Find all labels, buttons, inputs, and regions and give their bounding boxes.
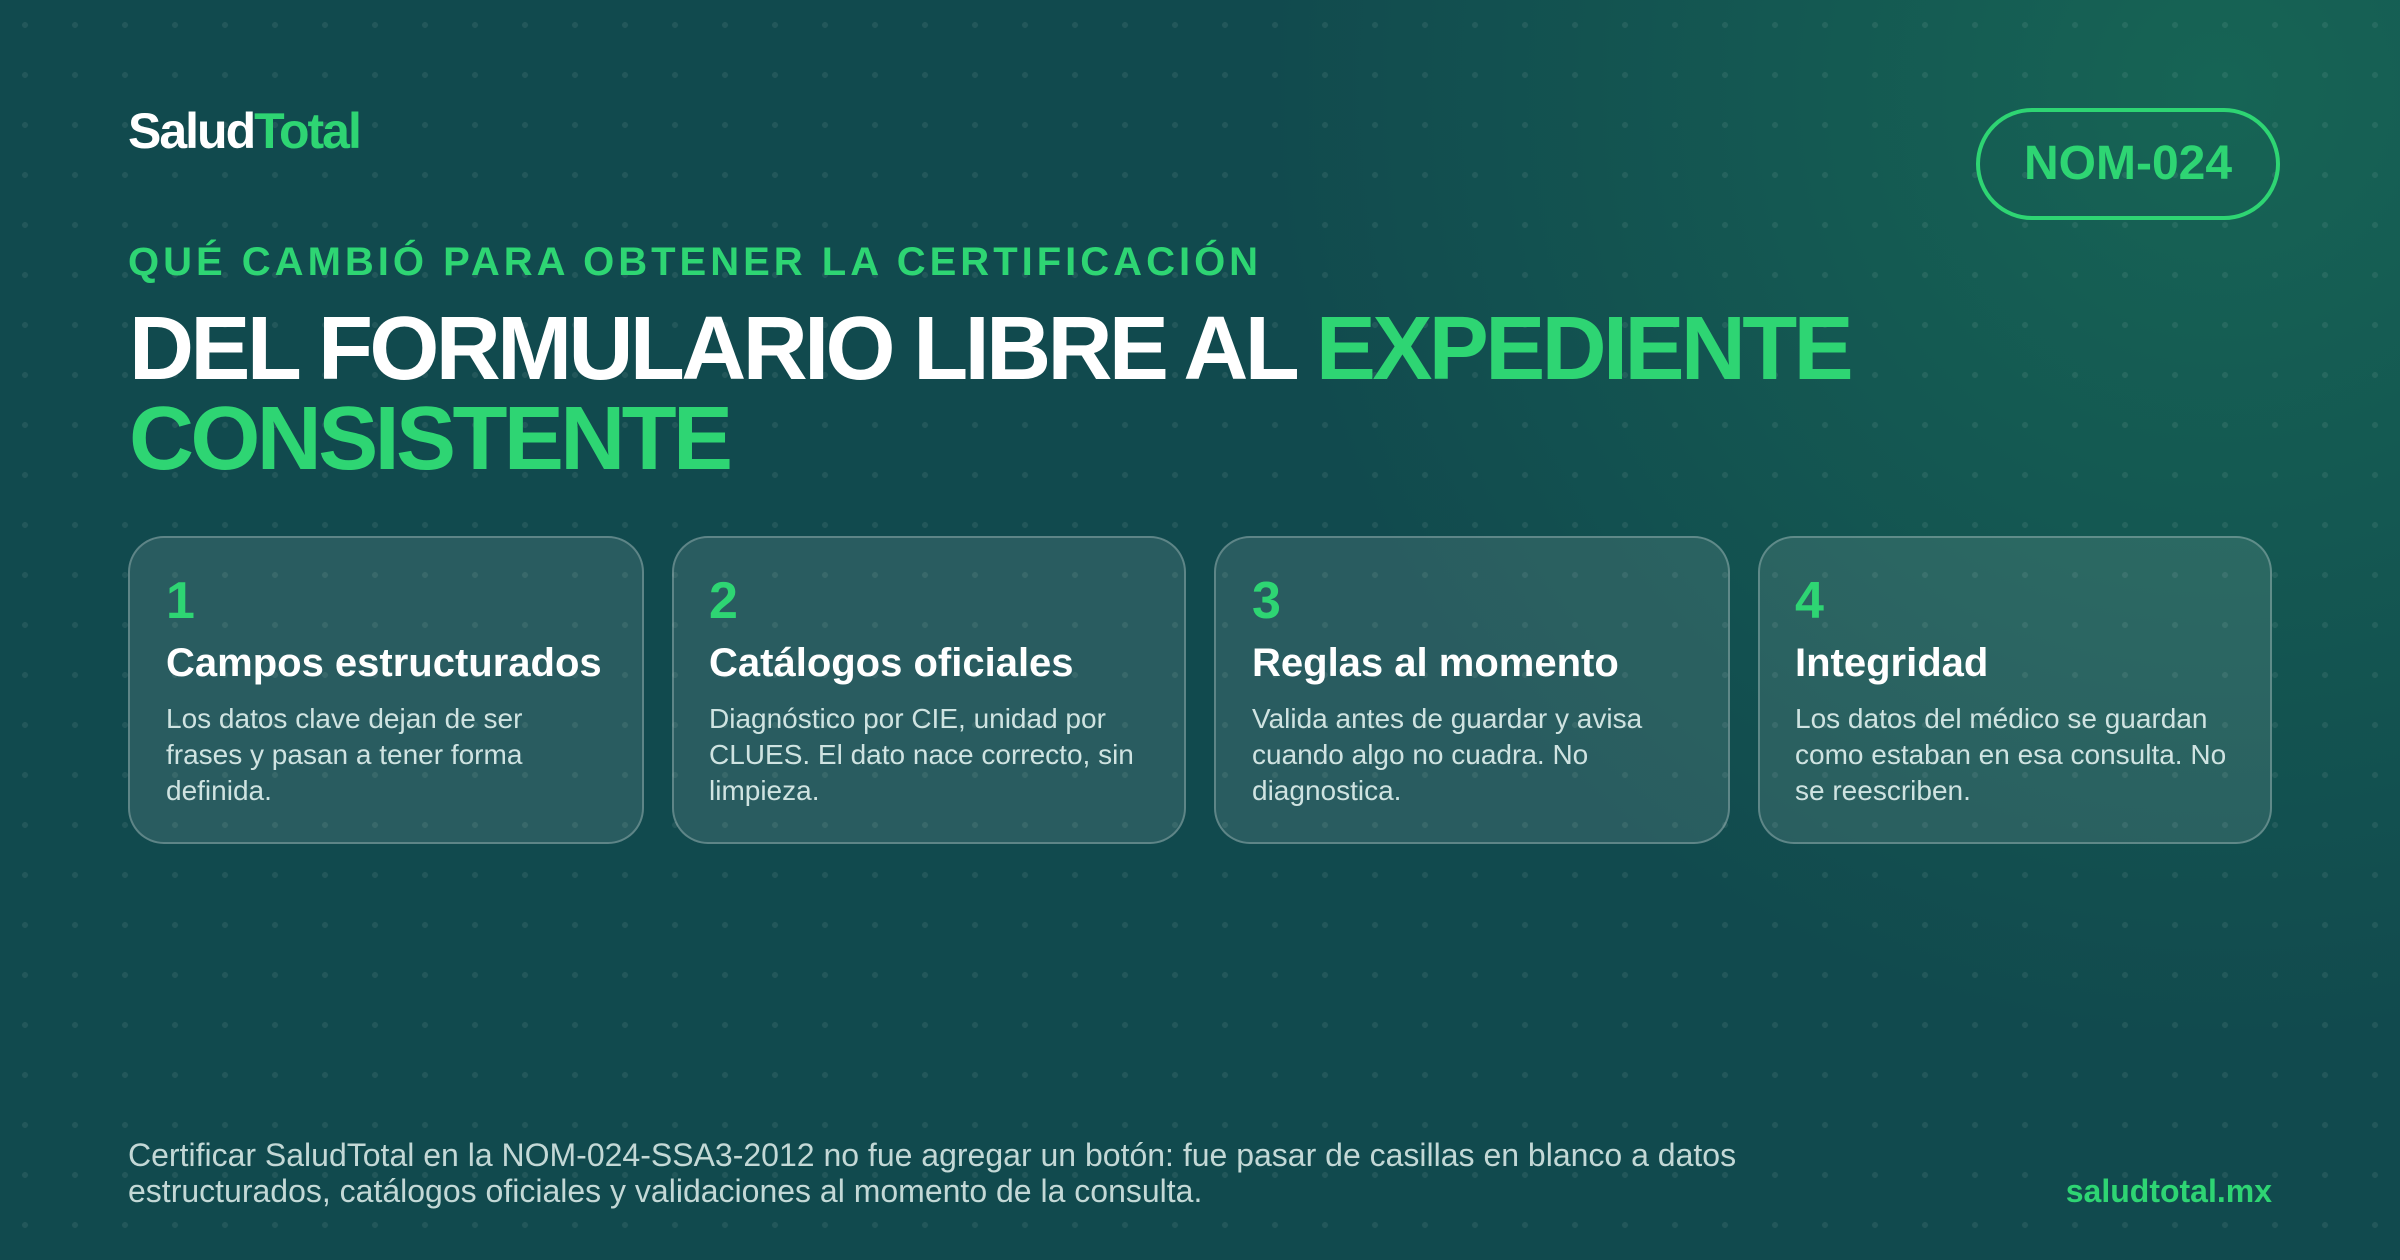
panel: card 1 bbox=[128, 536, 644, 844]
text: campos estructurados bbox=[166, 703, 522, 806]
heading: reglas al momento: Reglas al momento bbox=[1252, 641, 1619, 685]
footer text bbox=[128, 1137, 1736, 1209]
text: integridad: como estaban en esa consulta. No bbox=[1795, 739, 2226, 770]
heading: catálogos oficiales: Catálogos oficiales bbox=[709, 641, 1074, 685]
panel: card 2 bbox=[672, 536, 1186, 844]
text: integridad bbox=[1795, 703, 2226, 806]
panel: card 4 bbox=[1758, 536, 2272, 844]
text: catálogos oficiales: limpieza. bbox=[709, 775, 819, 806]
eyebrow: QUÉ CAMBIÓ PARA OBTENER LA CERTIFICACIÓN bbox=[128, 240, 1262, 284]
heading: integridad: Integridad bbox=[1795, 641, 1988, 685]
number 3: 3 bbox=[1252, 572, 1281, 630]
number 2: 2 bbox=[709, 572, 738, 630]
title: CONSISTENTE bbox=[129, 389, 729, 489]
title: DEL FORMULARIO LIBRE AL EXPEDIENTE bbox=[129, 299, 1850, 399]
text: reglas al momento: diagnostica. bbox=[1252, 775, 1401, 806]
text: integridad: se reescriben. bbox=[1795, 775, 1971, 806]
footer url: saludtotal.mx bbox=[2066, 1173, 2272, 1209]
text: integridad: Los datos del médico se guardan bbox=[1795, 703, 2208, 734]
number 1: 1 bbox=[166, 572, 195, 630]
text: campos estructurados: Los datos clave dejan de ser bbox=[166, 703, 522, 734]
text: reglas al momento bbox=[1252, 703, 1642, 806]
heading: campos estructurados: Campos estructurados bbox=[166, 641, 602, 685]
panel: card 3 bbox=[1214, 536, 1730, 844]
logo: SaludTotal bbox=[128, 103, 360, 159]
number 4: 4 bbox=[1795, 572, 1824, 630]
title bbox=[129, 299, 1850, 489]
text: reglas al momento: cuando algo no cuadra. No bbox=[1252, 739, 1588, 770]
text: catálogos oficiales: Diagnóstico por CIE, unidad por bbox=[709, 703, 1106, 734]
text: catálogos oficiales: CLUES. El dato nace correcto, sin bbox=[709, 739, 1134, 770]
text: reglas al momento: Valida antes de guardar y avisa bbox=[1252, 703, 1642, 734]
text: campos estructurados: definida. bbox=[166, 775, 272, 806]
footer text: Certificar SaludTotal en la NOM-024-SSA3-2012 no fue agregar un botón: fue pasar de casillas en blanco a datos bbox=[128, 1137, 1736, 1173]
text: campos estructurados: frases y pasan a tener forma bbox=[166, 739, 522, 770]
badge: NOM-024: NOM-024 bbox=[2024, 137, 2232, 190]
footer text: estructurados, catálogos oficiales y validaciones al momento de la consulta. bbox=[128, 1173, 1202, 1209]
badge: NOM-024 bbox=[1976, 108, 2280, 220]
text: catálogos oficiales bbox=[709, 703, 1134, 806]
